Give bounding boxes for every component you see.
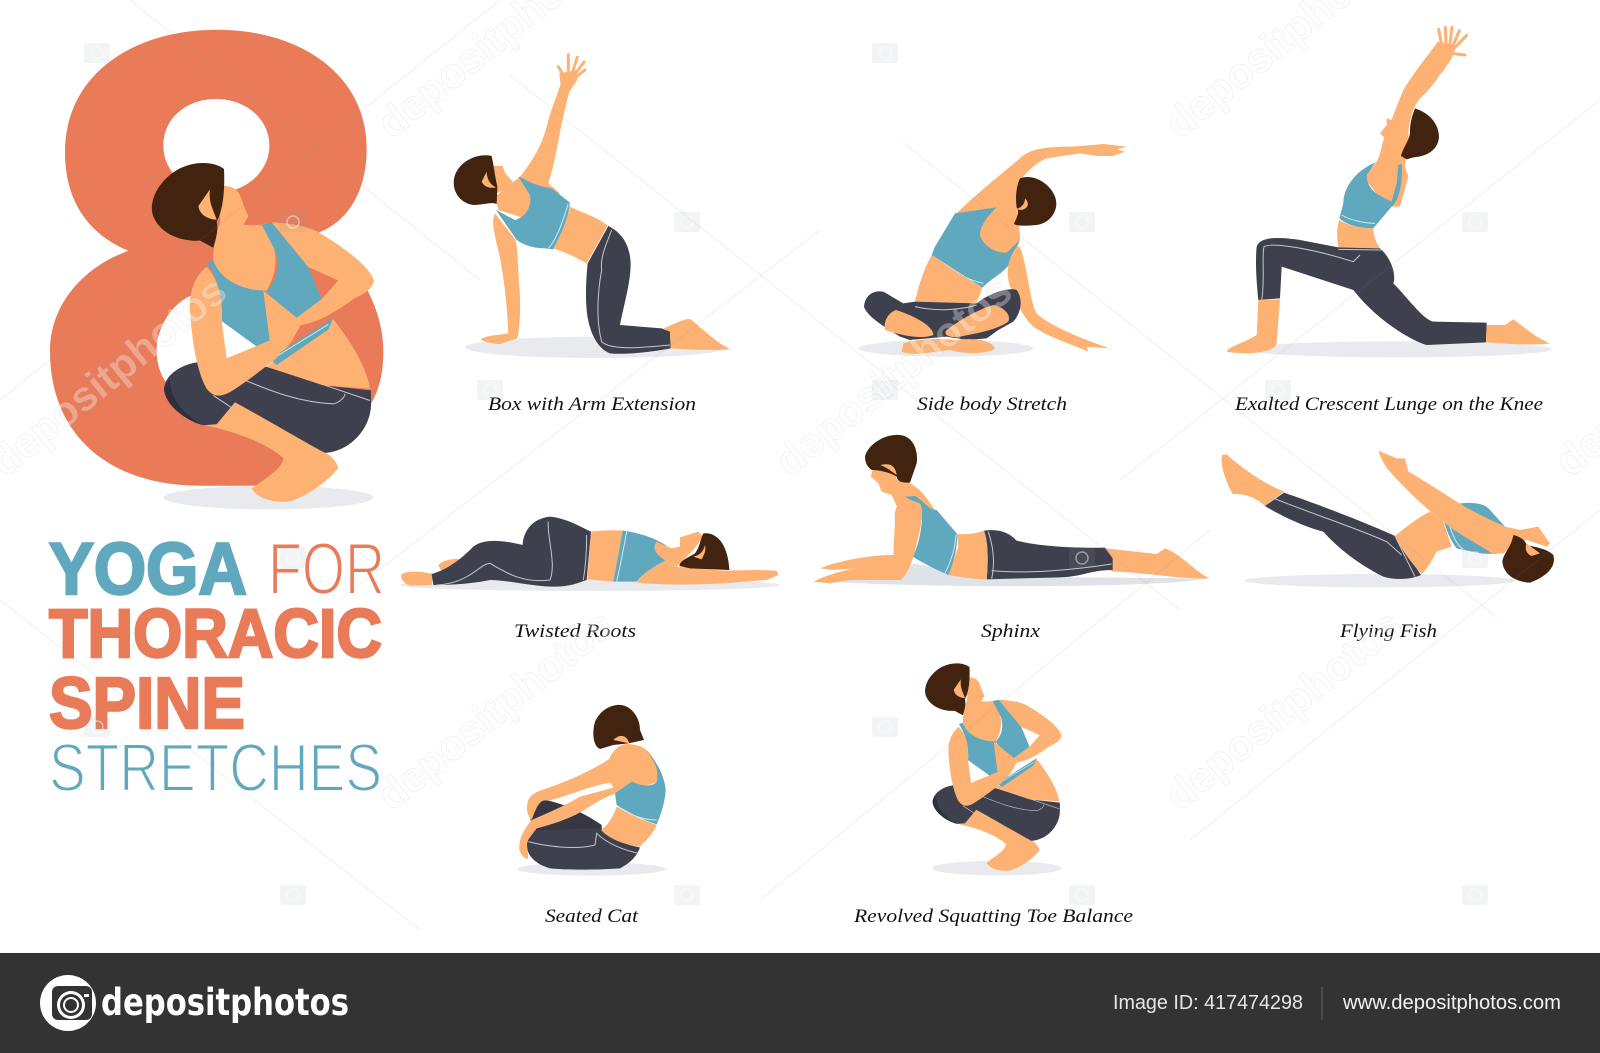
title: YOGA bbox=[49, 529, 247, 610]
icon: camera logo bbox=[40, 975, 96, 1031]
figure: exalted crescent lunge bbox=[1227, 27, 1552, 357]
logo wordmark: depositphotos bbox=[101, 981, 349, 1024]
title: STRETCHES bbox=[49, 730, 382, 806]
text: depositphotos bbox=[368, 600, 623, 819]
image id: Image ID: 417474298 bbox=[1113, 991, 1303, 1014]
caption: sphinx: Sphinx bbox=[981, 622, 1041, 642]
figure: flying fish bbox=[1222, 451, 1554, 587]
figure: twisted roots bbox=[400, 517, 780, 591]
figure: seated cat bbox=[518, 705, 666, 876]
caption: side body stretch: Side body Stretch bbox=[917, 395, 1067, 415]
number 8 bbox=[50, 30, 383, 486]
title: SPINE bbox=[49, 664, 245, 744]
title: FOR bbox=[268, 529, 385, 610]
title: THORACIC bbox=[49, 595, 382, 672]
caption: exalted crescent lunge: Exalted Crescent Lunge on the Knee bbox=[1234, 395, 1543, 415]
footer bar bbox=[0, 953, 1600, 1053]
title bbox=[49, 529, 385, 806]
figure: box with arm extension bbox=[454, 55, 730, 358]
caption: seated cat: Seated Cat bbox=[545, 907, 639, 927]
figure: hero squat pose bbox=[152, 163, 374, 509]
figure: side body stretch bbox=[859, 144, 1127, 357]
figure: revolved squatting toe balance bbox=[925, 663, 1062, 875]
figure: sphinx bbox=[813, 435, 1209, 586]
text: depositphotos bbox=[766, 266, 1021, 485]
caption: revolved squatting toe balance: Revolved Squatting Toe Balance bbox=[853, 907, 1133, 927]
website url: www.depositphotos.com bbox=[1342, 991, 1561, 1014]
caption: flying fish: Flying Fish bbox=[1339, 622, 1437, 642]
caption: twisted roots: Twisted Roots bbox=[514, 622, 636, 642]
caption: box with arm extension: Box with Arm Extension bbox=[488, 395, 696, 415]
text: depositphotos bbox=[1156, 600, 1411, 819]
